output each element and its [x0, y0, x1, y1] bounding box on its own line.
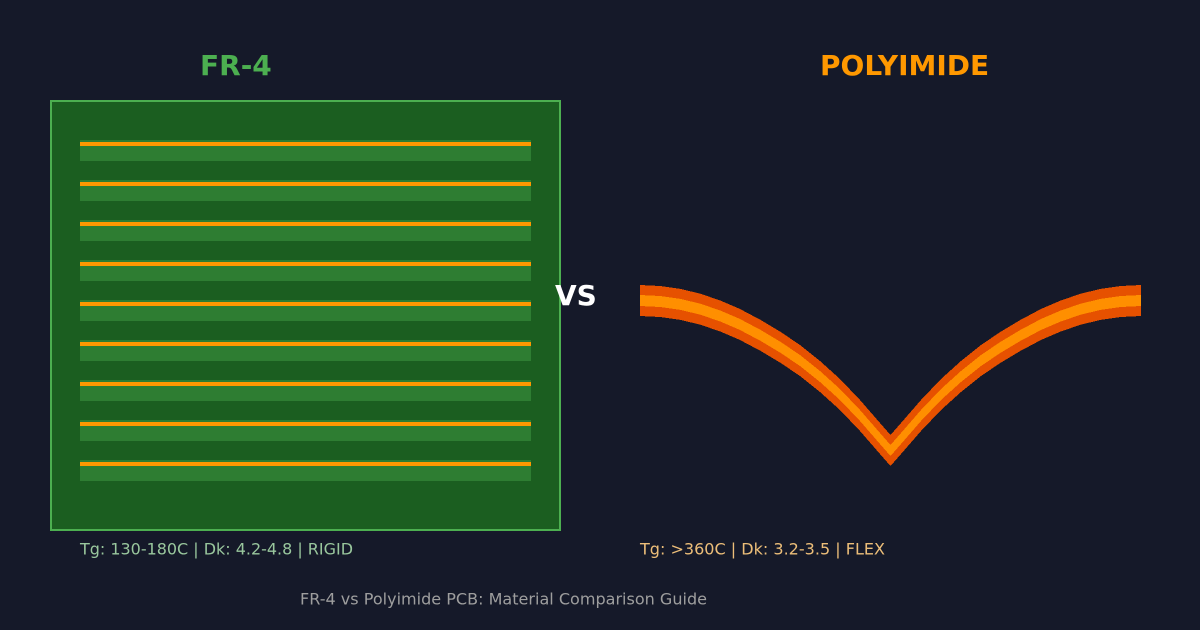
heading: FR-4: FR-4: [200, 49, 272, 82]
heading: Polyimide: POLYIMIDE: [820, 49, 989, 82]
layer 5: [80, 300, 531, 321]
panel: polyimide flex strip: [640, 285, 1141, 466]
footer caption: FR-4 vs Polyimide PCB: Material Comparison Guide: [300, 590, 707, 608]
inner copper band: [640, 295, 1141, 456]
layer 4: [80, 260, 531, 281]
layer 6: [80, 340, 531, 361]
layer 1: [80, 140, 531, 161]
board body: [51, 101, 560, 530]
layer 9: [80, 460, 531, 481]
panel: FR-4 rigid board: [51, 101, 560, 530]
layer 2: [80, 180, 531, 201]
layer 7: [80, 380, 531, 401]
layer 8: [80, 420, 531, 441]
label: VS: VS: [555, 279, 597, 312]
specs: Polyimide: Tg: >360C | Dk: 3.2-3.5 | FLEX: [639, 540, 885, 558]
outer flex band: [640, 285, 1141, 466]
specs: FR-4: Tg: 130-180C | Dk: 4.2-4.8 | RIGID: [79, 540, 353, 558]
layer 3: [80, 220, 531, 241]
